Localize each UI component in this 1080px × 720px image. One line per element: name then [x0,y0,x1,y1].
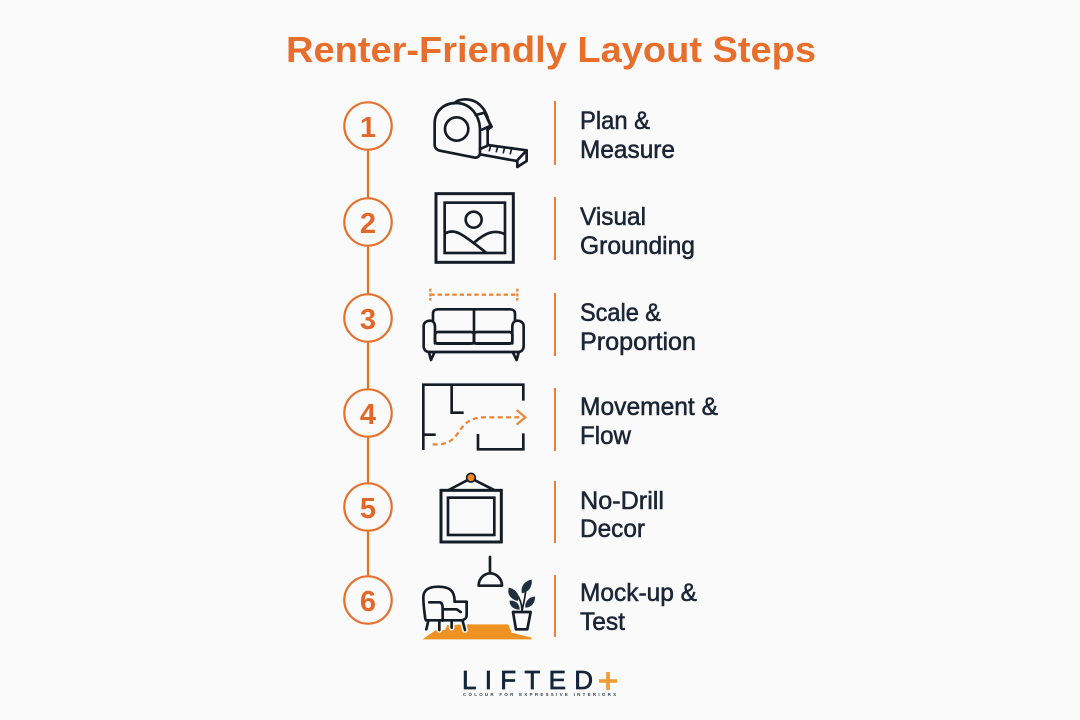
title: Renter-Friendly Layout Steps [286,29,816,70]
step 5 number: 5 [360,493,376,525]
label: step 2 [580,203,695,260]
step 2 number [344,198,392,246]
label: step 1: Plan & [580,107,650,135]
icon: sofa with dimension line [424,289,524,360]
divider [554,101,556,637]
label: step 4 [580,393,718,450]
label: step 4: Movement & [580,393,718,421]
label: step 2: Visual [580,203,646,231]
step 3 number: 3 [360,304,376,336]
step 3 number [344,294,392,342]
logo: LIFTED [462,665,593,695]
label: step 1 [580,107,675,164]
step 6 number: 6 [360,586,376,618]
icon: tape measure [435,99,527,167]
label: step 2: Grounding [580,232,695,260]
label: step 5: No-Drill [580,487,664,515]
label: step 4: Flow [580,422,632,450]
label: step 6: Test [580,608,625,636]
icon: hanging frame [441,473,501,542]
label: step 3: Proportion [580,328,696,356]
step 4 number: 4 [360,399,376,431]
icon: room mock-up [422,557,535,639]
label: step 6: Mock-up & [580,579,697,607]
label: step 6 [580,579,697,636]
step 2 number: 2 [360,208,376,240]
label: step 5: Decor [580,515,645,543]
step 1 number [344,102,392,150]
icon: floor plan with path [423,385,525,450]
timeline connector [367,150,369,576]
icon: framed picture [436,194,513,262]
step 4 number [344,389,392,437]
label: step 3: Scale & [580,299,661,327]
label: step 1: Measure [580,136,675,164]
label: step 5 [580,487,664,543]
logo: COLOUR FOR EXPRESSIVE INTERIORS [463,692,616,697]
step 6 number [344,576,392,624]
step 1 number: 1 [360,112,376,144]
label: step 3 [580,299,696,356]
step 5 number [344,483,392,531]
